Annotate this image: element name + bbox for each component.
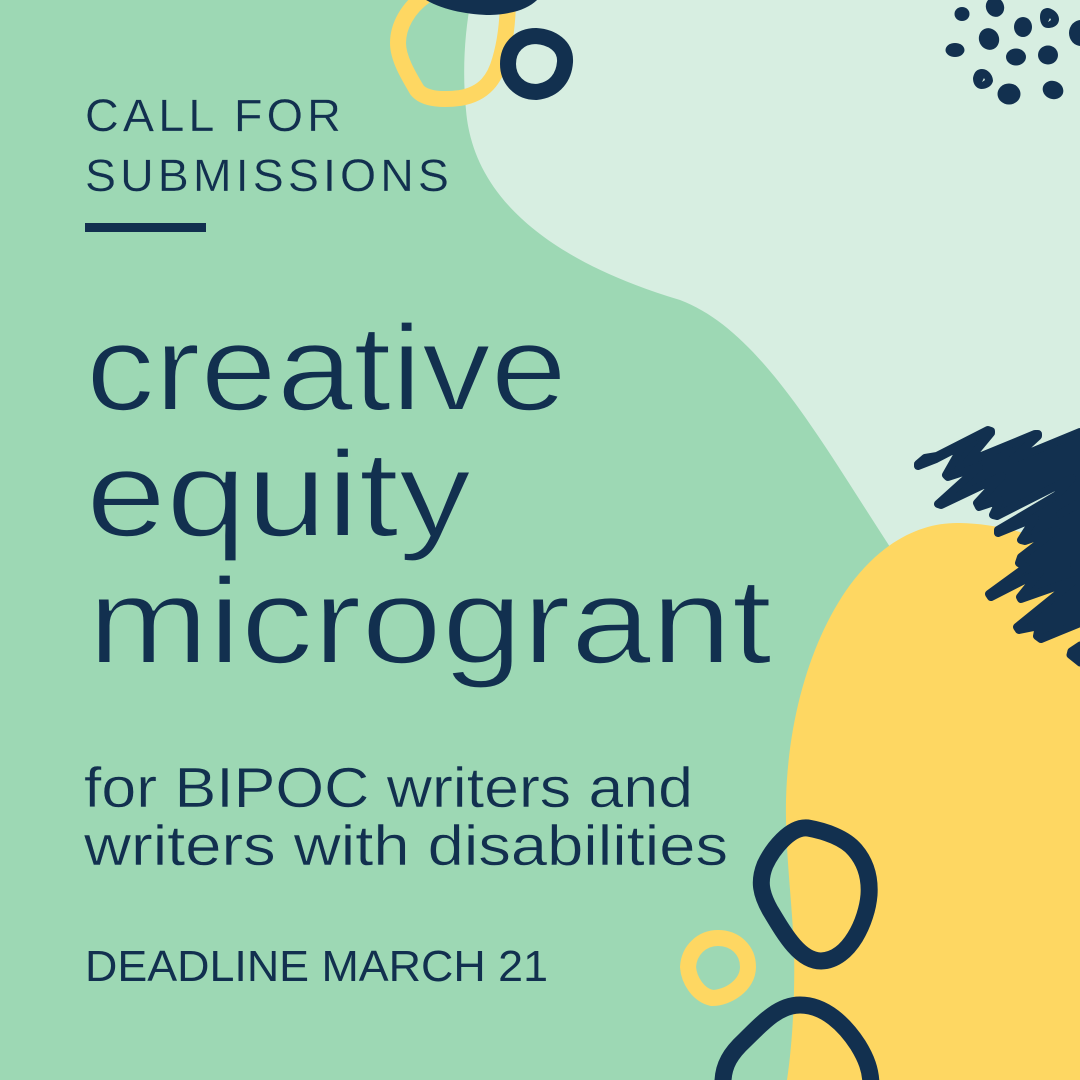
icon: navy scribble <box>918 430 1080 639</box>
icon: yellow ring top <box>398 0 508 99</box>
icon: navy ring large <box>761 828 869 961</box>
eyebrow: call for submissions: CALL FOR <box>85 90 345 141</box>
shape: yellow blob <box>786 523 1080 1080</box>
deadline: DEADLINE MARCH 21 <box>85 942 548 991</box>
icon: navy ring top <box>508 36 565 92</box>
subtitle: eligibility: writers with disabilities <box>83 814 728 878</box>
title: creative equity microgrant <box>86 300 772 689</box>
shape: pale mint blob <box>464 0 1080 700</box>
eyebrow: call for submissions <box>85 90 453 201</box>
title: creative equity microgrant: microgrant <box>88 553 772 689</box>
icon: navy blob top <box>423 0 539 15</box>
title: creative equity microgrant: equity <box>86 426 471 562</box>
subtitle: eligibility <box>83 756 728 878</box>
subtitle: eligibility: for BIPOC writers and <box>84 756 693 820</box>
eyebrow: call for submissions: SUBMISSIONS <box>85 150 453 201</box>
icon: yellow ring small <box>688 938 748 998</box>
icon: dot cluster <box>946 0 1080 104</box>
icon: navy ring bottom <box>723 1005 871 1080</box>
icon: navy scribble tail <box>1070 645 1080 663</box>
divider bar <box>85 223 206 232</box>
title: creative equity microgrant: creative <box>86 300 567 436</box>
